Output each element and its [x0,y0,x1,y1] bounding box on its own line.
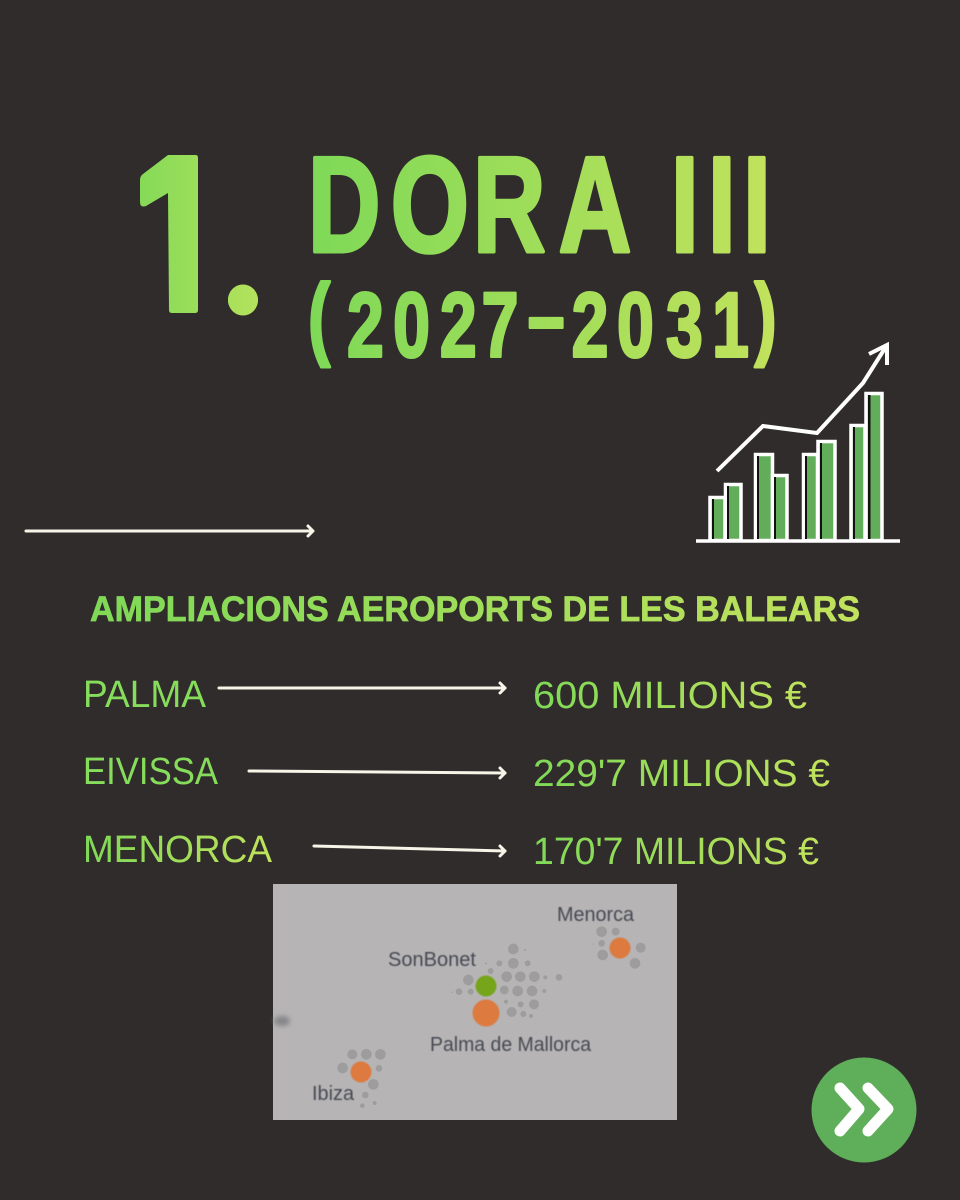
title number: 1. [114,106,276,364]
row: Palma [83,674,807,717]
row: Eivissa: EIVISSA [83,751,219,793]
row: Menorca [83,829,819,873]
map dots: grey [337,926,646,1108]
map labels: Ibiza [312,1083,355,1105]
map labels: Menorca [557,904,635,926]
next button [812,1058,916,1162]
icon: rising bar chart [696,345,900,541]
title number [140,155,258,316]
row: Menorca: MENORCA [83,829,273,871]
row: Eivissa [83,751,830,795]
title: DORA III: DORA III [308,130,771,281]
title: years: (2027–2031) [308,264,777,376]
row: Palma: 600 MILIONS € [533,675,807,717]
map labels: SonBonet [388,949,476,971]
map marker: Son Bonet [476,976,496,996]
map marker: Menorca [610,938,630,958]
row: Menorca: 170'7 MILIONS € [533,831,819,873]
map labels [312,904,635,1105]
map marker: Ibiza [350,1062,372,1082]
map labels: Palma de Mallorca [430,1034,592,1056]
row: Palma: PALMA [83,674,207,716]
map marker: Palma de Mallorca [472,1000,500,1026]
row: Eivissa: 229'7 MILIONS € [533,753,830,795]
heading: AMPLIACIONS AEROPORTS DE LES BALEARS [90,590,860,629]
arrow: divider [26,526,313,536]
map: Balearic airports [273,884,677,1120]
